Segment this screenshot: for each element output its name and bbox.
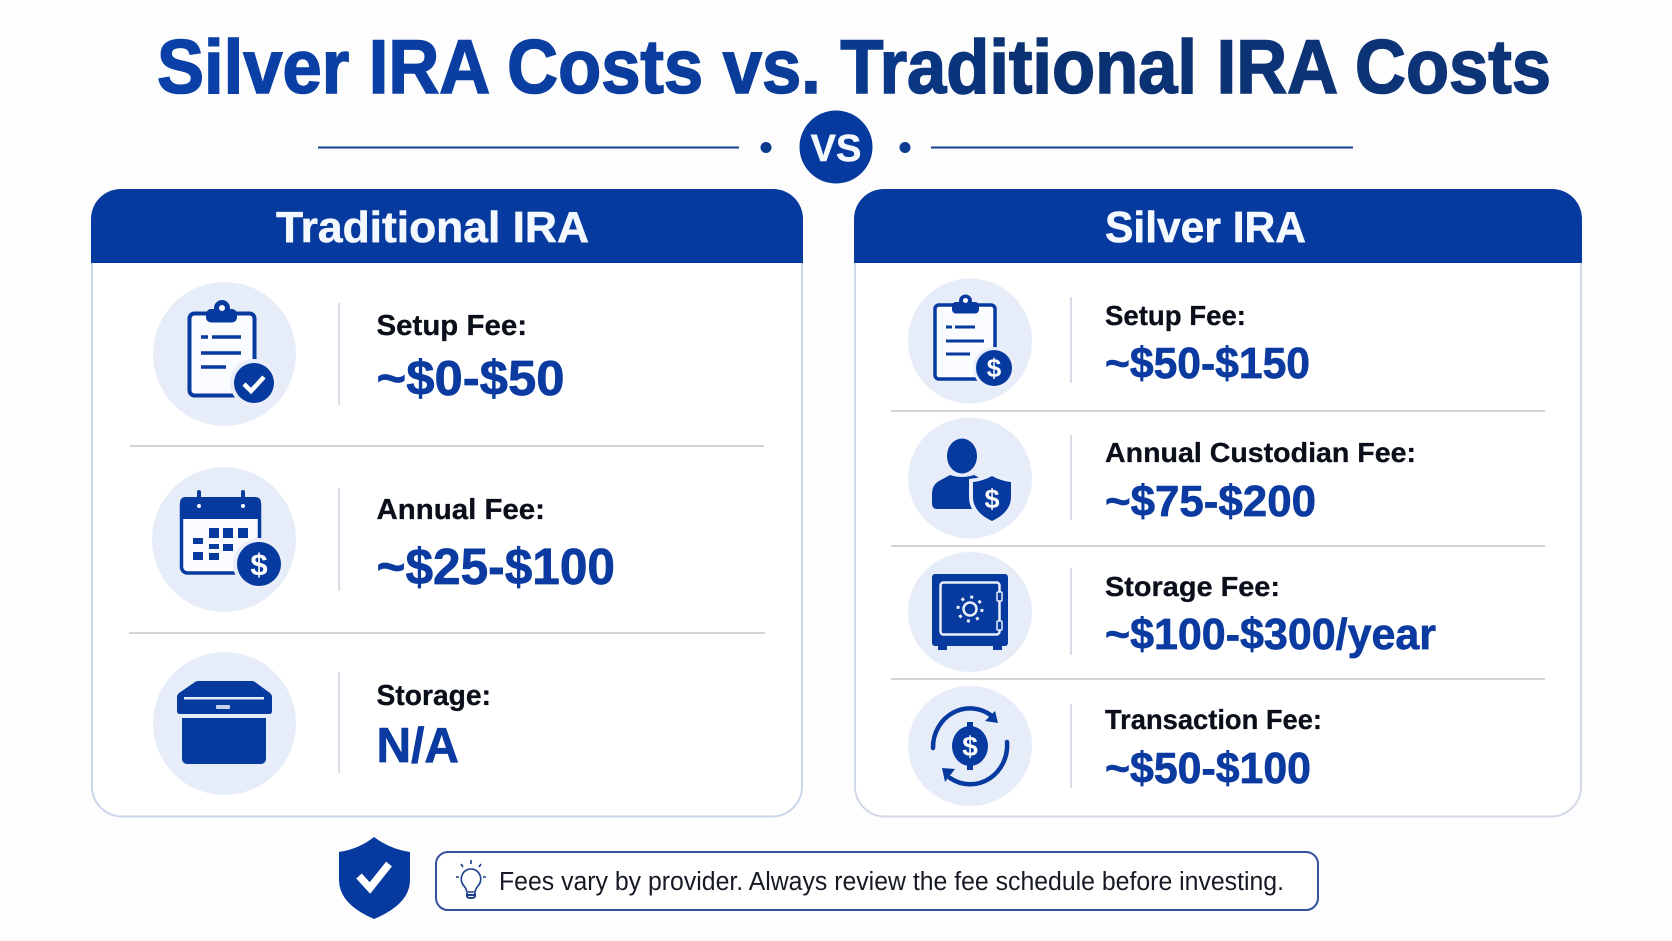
icon: circular dollar transfer	[933, 708, 1007, 784]
icon: safe	[932, 574, 1008, 650]
row: transaction fee: ~$50-$100	[1105, 744, 1311, 793]
row: setup fee	[908, 278, 1310, 404]
row: storage fee: ~$100-$300/year	[1105, 610, 1436, 659]
vs divider: VS	[811, 128, 861, 170]
row: annual fee	[152, 467, 615, 612]
title: Silver IRA Costs vs. Traditional IRA Costs	[157, 25, 1551, 110]
row: annual custodian fee: Annual Custodian Fee:	[1105, 437, 1416, 468]
row: annual fee: Annual Fee:	[376, 494, 545, 526]
icon: person with shield	[932, 438, 1015, 525]
icon: clipboard with check	[190, 300, 278, 407]
icon: light bulb	[456, 860, 486, 898]
row: storage fee: Storage Fee:	[1105, 571, 1280, 602]
row: annual custodian fee: ~$75-$200	[1105, 477, 1316, 526]
row: annual fee: ~$25-$100	[376, 538, 615, 595]
icon: calendar with dollar: $	[250, 547, 268, 582]
row: setup fee: ~$50-$150	[1105, 339, 1310, 388]
row: storage: N/A	[376, 719, 459, 773]
note text: Fees vary by provider. Always review the fee schedule before investing.	[499, 868, 1284, 896]
panel header: silver ira	[854, 189, 1582, 263]
panel: traditional ira	[91, 189, 803, 816]
heading: traditional ira: Traditional IRA	[276, 203, 589, 252]
row: transaction fee	[908, 686, 1322, 806]
icon: calendar with dollar	[180, 492, 285, 590]
heading: silver ira: Silver IRA	[1105, 203, 1306, 252]
row: setup fee: Setup Fee:	[1105, 300, 1246, 331]
icon: clipboard with dollar: $	[987, 353, 1002, 383]
panel: silver ira	[854, 189, 1582, 816]
icon: person with shield: $	[984, 484, 1000, 514]
row: setup fee	[153, 282, 564, 426]
icon: storage box	[177, 681, 272, 764]
panel header: traditional ira	[91, 189, 803, 263]
row: setup fee: ~$0-$50	[376, 352, 564, 406]
row: setup fee: Setup Fee:	[376, 310, 527, 342]
row: storage	[153, 652, 491, 795]
icon: clipboard with dollar	[935, 294, 1015, 389]
row: storage fee	[908, 552, 1436, 672]
row: annual custodian fee	[908, 418, 1416, 538]
icon: circular dollar transfer: $	[962, 731, 978, 762]
row: storage: Storage:	[376, 680, 491, 712]
callout: fee note	[436, 852, 1318, 910]
icon: shield with check	[339, 837, 410, 919]
vs divider	[318, 110, 1353, 184]
row: transaction fee: Transaction Fee:	[1105, 704, 1322, 735]
